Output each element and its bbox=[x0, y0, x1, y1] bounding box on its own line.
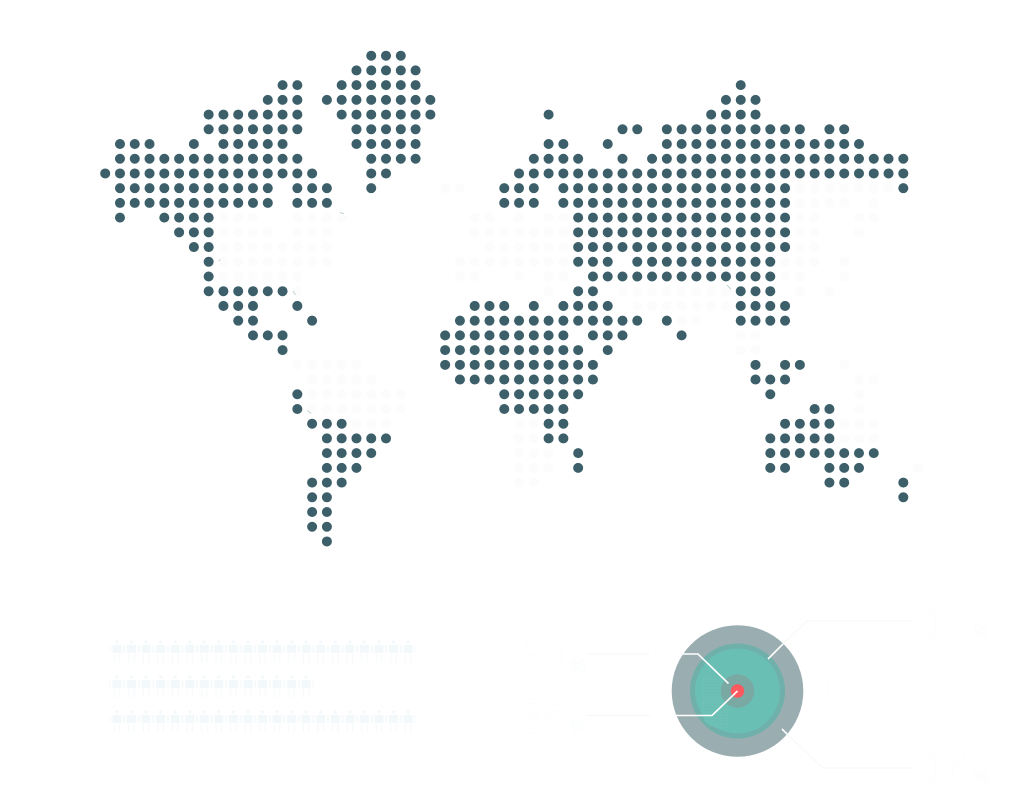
stat: 50%: % bbox=[570, 656, 586, 676]
faint dots: inland and unhighlighted regions bbox=[223, 188, 918, 483]
pictogram row 2 bbox=[110, 675, 313, 698]
stat: 16%: 16 bbox=[926, 741, 968, 793]
dots: North America bbox=[105, 85, 327, 350]
stat: 16%: % bbox=[973, 767, 989, 787]
dots: Eurasia bbox=[504, 85, 903, 350]
stat: 36%: 36 bbox=[521, 690, 566, 742]
core bbox=[721, 674, 754, 708]
stat: 12%: 12 bbox=[926, 595, 968, 647]
concentric circle chart bbox=[646, 600, 828, 782]
stat: 12%: % bbox=[973, 621, 989, 641]
centre red dot bbox=[731, 684, 744, 698]
dotted segment bbox=[701, 670, 728, 730]
leader line: 36% bbox=[588, 691, 738, 716]
stat: 36%: % bbox=[570, 716, 586, 736]
world dot map bbox=[105, 56, 918, 541]
leader line: 12% bbox=[768, 621, 912, 659]
dots: Oceania bbox=[756, 365, 903, 497]
inner disc bbox=[695, 648, 780, 734]
dots: Africa bbox=[445, 306, 593, 468]
pictogram row 3 bbox=[110, 710, 415, 732]
dots: Greenland bbox=[327, 56, 431, 188]
pictogram row 1 bbox=[110, 640, 415, 662]
leader line: 50% bbox=[588, 654, 728, 684]
outer ring bbox=[672, 625, 803, 757]
middle ring bbox=[690, 644, 785, 738]
outer faint halo ring bbox=[646, 600, 828, 782]
stat: 50%: 50 bbox=[521, 630, 566, 682]
dots: South America bbox=[297, 394, 386, 541]
leader line: 16% bbox=[782, 729, 912, 768]
